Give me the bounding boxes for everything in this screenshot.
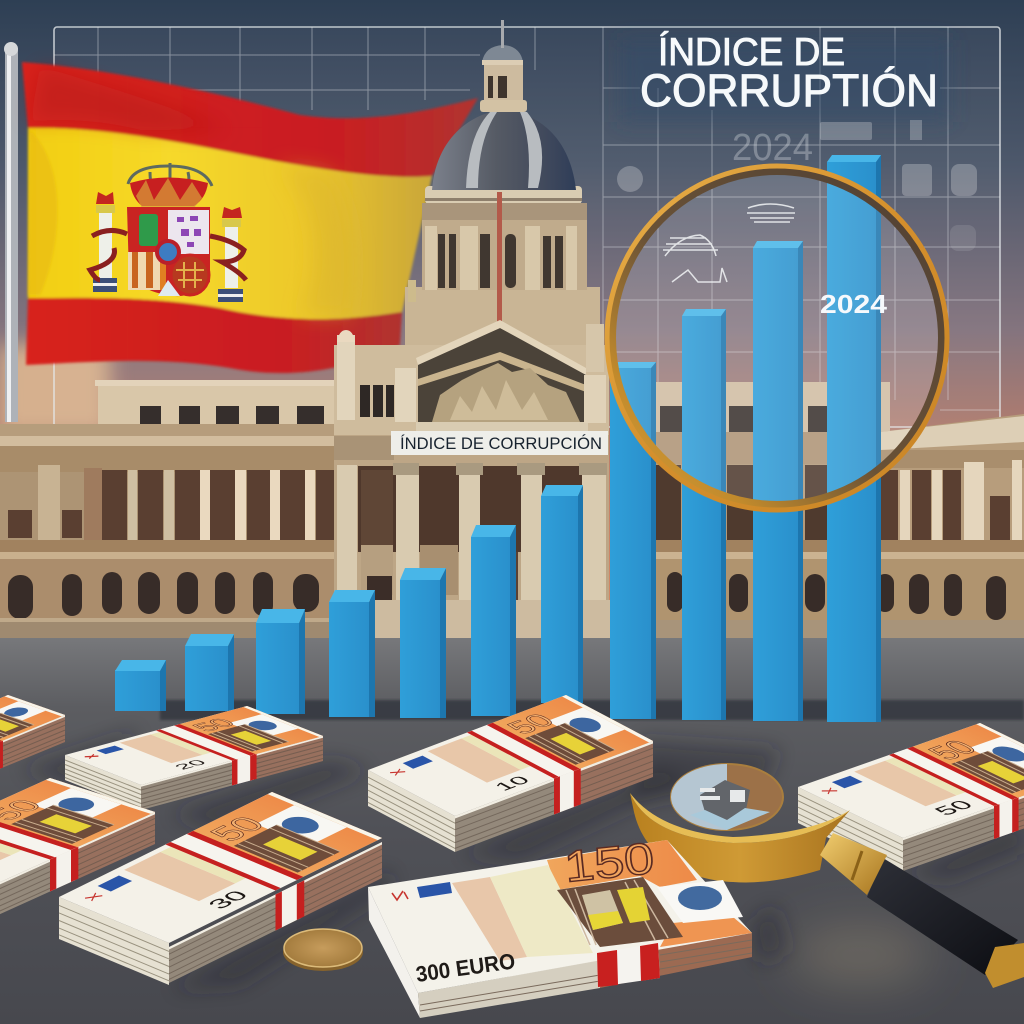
stack center (368, 695, 653, 852)
stack far left (0, 695, 65, 812)
lens base (630, 793, 850, 882)
building: palace wings (0, 380, 1024, 650)
stack back left: 20 (170, 758, 211, 771)
glass data panel grid (54, 27, 1000, 427)
coin (283, 929, 363, 971)
stack right: 50 (920, 736, 986, 764)
bar chart (115, 155, 881, 722)
flag pole (4, 42, 18, 422)
bar 7 (541, 485, 583, 703)
bar 5 (400, 568, 446, 718)
bar 9 (682, 309, 726, 720)
bar 4 (329, 590, 375, 717)
bar 6 (471, 525, 516, 716)
bar 11 (827, 155, 881, 722)
stack front left: 50 (201, 812, 274, 845)
stack front left: 30 (202, 888, 254, 912)
stack center: 10 (490, 774, 535, 793)
title backdrop glow (620, 40, 950, 122)
pediment sculpture (432, 363, 580, 422)
bar 3 (256, 609, 305, 714)
flag coat of arms (90, 163, 246, 302)
stack front left (59, 792, 382, 985)
lens coin (671, 764, 783, 830)
ghost data marks (617, 120, 977, 251)
ghost year: 2024 (732, 127, 813, 169)
handle (867, 858, 1018, 975)
portico columns (337, 465, 606, 603)
title: ÍNDICE DE (658, 31, 845, 74)
building: dome and drum (405, 20, 600, 345)
bar 8 (610, 362, 656, 719)
stack right (798, 723, 1024, 874)
warm haze at lower left (0, 345, 110, 435)
left wing (0, 380, 338, 648)
table highlight (790, 925, 930, 985)
table surface (0, 638, 1024, 1024)
front note value: 300 EURO (414, 948, 517, 987)
money stacks (0, 695, 1024, 985)
building sign: ÍNDICE DE CORRUPCIÓN (400, 434, 602, 453)
flag of Spain (22, 62, 478, 373)
title (640, 31, 938, 116)
title: CORRUPTIÓN (640, 65, 938, 116)
lens label: 2024 (820, 289, 888, 319)
stack left (0, 778, 155, 939)
building: central portico (330, 320, 620, 640)
stack back left (65, 706, 323, 810)
stack center: 50 (500, 710, 562, 738)
bar 1 (115, 660, 166, 711)
lens stripe marks (663, 204, 795, 282)
front banknote stack (368, 834, 752, 1018)
right wing (650, 382, 1024, 650)
magnifying glass, upper (607, 166, 947, 510)
background sky (0, 0, 1024, 660)
front note denomination: 150 (562, 834, 657, 892)
stack back left: 50 (186, 716, 242, 734)
table shadows (20, 730, 1024, 990)
bar 10 (753, 241, 803, 721)
bar 2 (185, 634, 234, 711)
stack right: 50 (929, 798, 979, 818)
magnifying glass, lower (630, 764, 1024, 988)
